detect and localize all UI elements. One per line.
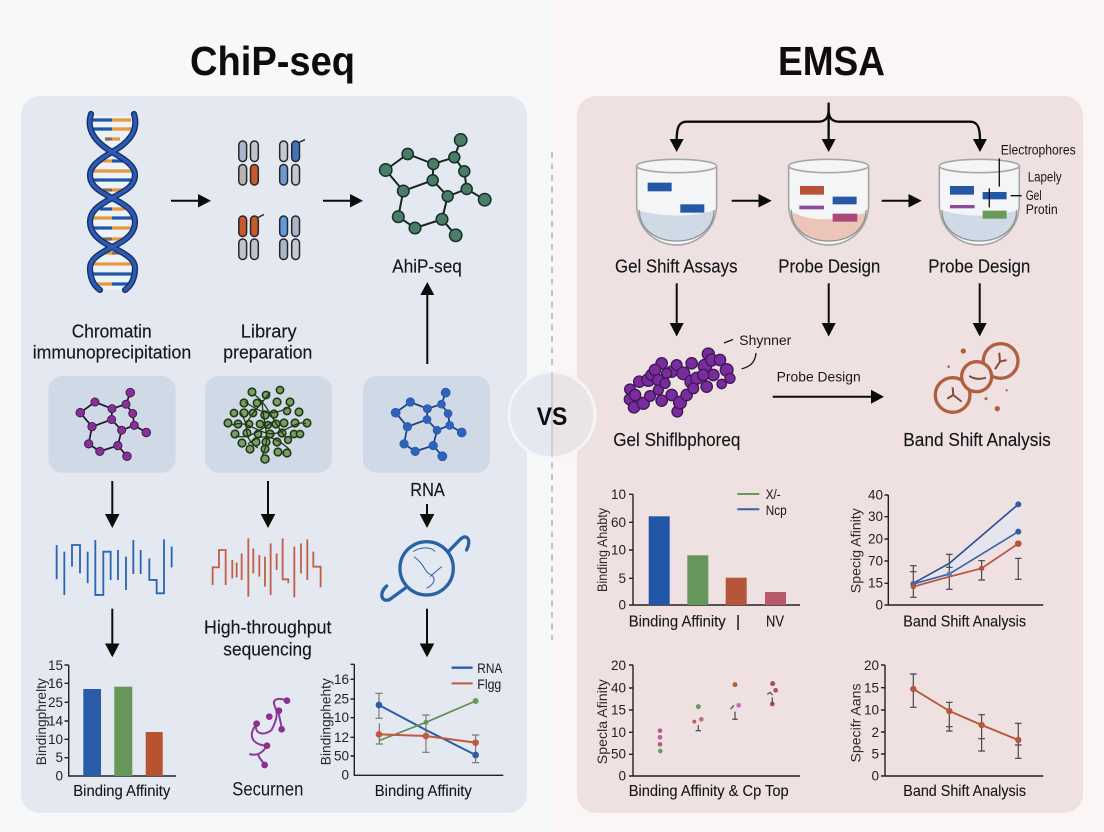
- icon: DNA double helix: [90, 114, 135, 290]
- chart: ChiP-seq bar chart: 5: [55, 750, 63, 765]
- chart: EMSA bar chart: Ncp: [766, 503, 787, 518]
- arrow: beaker 2 to 3: [882, 194, 922, 208]
- tile: blue network: [363, 376, 490, 473]
- chart: ChiP-seq line chart: Binding Affinity: [375, 783, 472, 800]
- chart: EMSA multi-line chart: 15: [868, 576, 883, 590]
- VS badge: VS: [537, 403, 567, 431]
- arrow: blue trace down: [105, 609, 120, 657]
- chart: EMSA multi-line chart: 0: [875, 598, 883, 612]
- arrow: up to AhiP-seq: [420, 282, 434, 364]
- chart: EMSA dot plot: 40: [611, 680, 626, 696]
- chart: ChiP-seq bar chart: Binding Affinity: [73, 783, 170, 800]
- chart: EMSA bar chart: NV: [766, 614, 784, 631]
- panel: ChiP-seq background: [21, 96, 527, 813]
- label: Gel Shift Assays: Gel Shift Assays: [615, 256, 738, 277]
- chart: EMSA dot plot: Binding Affinity & Cp Top: [629, 783, 789, 800]
- title: EMSA: EMSA: [778, 38, 885, 84]
- chart: ChiP-seq line chart: 0: [341, 768, 349, 782]
- label: Chromatin immunoprecipitation: [33, 320, 191, 362]
- label: Probe Design (right): Probe Design: [928, 256, 1030, 277]
- chart: EMSA bar chart: [594, 487, 800, 631]
- chart: EMSA dot plot: 10: [611, 725, 626, 740]
- arrow: DNA to library: [171, 194, 211, 208]
- chart: EMSA bar chart: 10: [611, 542, 626, 558]
- chart: ChiP-seq line chart: 10: [334, 710, 349, 725]
- chart: ChiP-seq line chart: 16: [334, 672, 349, 687]
- chart: EMSA dot plot: 0: [618, 768, 626, 784]
- label: Electrophores: Electrophores: [1001, 142, 1076, 157]
- label: RNA: RNA: [410, 479, 445, 500]
- arrow: RNA down: [420, 504, 434, 528]
- chart: EMSA descending line chart: 10: [864, 702, 879, 718]
- arrow: beaker 1 to 2: [732, 194, 772, 208]
- chart: ChiP-seq bar chart: Bindingphrelty: [33, 678, 49, 765]
- icon: green molecular network: [380, 134, 491, 242]
- chart: ChiP-seq line chart: [318, 661, 503, 800]
- label: High-throughput sequencing: sequencing: [223, 638, 312, 660]
- label: Securnen: Securnen: [232, 779, 303, 801]
- label: Protin: Protin: [1026, 202, 1058, 217]
- chart: ChiP-seq line chart: 25: [334, 692, 349, 706]
- chart: EMSA descending line chart: 20: [864, 658, 879, 673]
- arrow: branching tree from EMSA title: [670, 103, 987, 152]
- arrow: middle beaker down: [822, 283, 836, 336]
- icon: band shift rings: [935, 344, 1018, 412]
- chart: EMSA dot plot: 15: [611, 702, 626, 718]
- icon: chromosome fragments: [239, 140, 305, 260]
- chart: EMSA multi-line chart: 30: [868, 509, 883, 524]
- chart: EMSA descending line chart: Band Shift Analysis: [903, 783, 1026, 800]
- icon: beaker 1: [637, 159, 717, 245]
- chart: ChiP-seq line chart: 12: [334, 730, 349, 745]
- chart: EMSA descending line chart: [848, 658, 1043, 800]
- arrow: purple tile down: [105, 481, 120, 528]
- label: Lapely: Lapely: [1028, 170, 1062, 185]
- chart: EMSA bar chart: Binding Affinity: [629, 614, 726, 631]
- label: High-throughput sequencing: High-throughput: [204, 616, 332, 638]
- chart: EMSA multi-line chart: 20: [868, 532, 883, 546]
- label: AhiP-seq: AhiP-seq: [392, 256, 462, 277]
- arrow: library to network: [323, 194, 363, 208]
- chart: ChiP-seq bar chart: 15: [48, 658, 63, 673]
- VS badge: [509, 372, 595, 458]
- callout: Shynner: Shynner: [739, 333, 792, 348]
- chart: EMSA descending line chart: 2: [871, 725, 879, 740]
- arrow: left beaker down: [670, 283, 684, 336]
- chart: EMSA descending line chart: Specifr Aans: [848, 684, 864, 762]
- callout: Shynner: [724, 333, 792, 369]
- label: Probe Design (middle): Probe Design: [778, 256, 880, 277]
- label: Band Shift Analysis: Band Shift Analysis: [903, 429, 1051, 450]
- chart: EMSA bar chart: 60: [611, 515, 626, 530]
- chart: EMSA dot plot: [594, 658, 800, 800]
- icon: purple protein cluster: [624, 348, 735, 417]
- icon: RNA loop ring: [382, 537, 469, 600]
- label: Chromatin immunoprecipitation: Chromatin: [72, 320, 152, 341]
- icon: purple strand: [249, 697, 290, 768]
- chart: EMSA bar chart: Binding Ahabty: [594, 508, 610, 592]
- chart: ChiP-seq bar chart: 10: [48, 732, 63, 747]
- chart: EMSA bar chart: |: [736, 614, 740, 631]
- chart: EMSA multi-line chart: 70: [868, 554, 883, 568]
- chart: EMSA descending line chart: 15: [864, 680, 879, 696]
- chart: EMSA multi-line chart: Band Shift Analysis: [903, 614, 1026, 631]
- title: ChiP-seq: ChiP-seq: [190, 38, 355, 84]
- label: Library preparation: preparation: [223, 341, 312, 362]
- chart: EMSA descending line chart: 0: [871, 768, 879, 784]
- chart: EMSA multi-line chart: Specig Afinity: [848, 508, 864, 593]
- chart: ChiP-seq line chart: Bindingphehty: [318, 678, 334, 765]
- chart: ChiP-seq bar chart: 0: [55, 768, 63, 784]
- chart: ChiP-seq line chart: Flgg: [477, 677, 501, 692]
- chart: EMSA multi-line chart: 40: [868, 488, 883, 502]
- icon: beaker 3 with callouts: [939, 158, 1022, 245]
- arrow: green tile down: [261, 481, 275, 528]
- arrow: right beaker down: [973, 283, 987, 336]
- chart: ChiP-seq line chart: 50: [334, 748, 349, 764]
- label: Gel: Gel: [1026, 188, 1042, 203]
- chart: ChiP-seq bar chart: 16: [48, 676, 63, 691]
- chart: EMSA bar chart: 10: [611, 487, 626, 502]
- label: Library preparation: Library: [241, 320, 297, 341]
- label: Gel Shiflbphoreq: Gel Shiflbphoreq: [613, 429, 740, 450]
- label: Chromatin immunoprecipitation: immunoprecipitation: [33, 341, 191, 362]
- chart: EMSA bar chart: X/-: [766, 487, 781, 502]
- chart: ChiP-seq bar chart: 25: [48, 695, 63, 710]
- label: High-throughput sequencing: [204, 616, 332, 660]
- chart: EMSA bar chart: 5: [618, 571, 626, 586]
- chart: EMSA descending line chart: 5: [871, 746, 879, 762]
- arrow: ring down: [420, 609, 434, 657]
- panel: EMSA background: [577, 96, 1083, 813]
- chart: EMSA bar chart: 0: [618, 598, 626, 612]
- chart: ChiP-seq bar chart: 14: [48, 714, 63, 728]
- chart: EMSA multi-line chart: [848, 488, 1043, 631]
- label: Library preparation: [223, 320, 312, 362]
- chart: red sequencing trace: [213, 538, 321, 597]
- chart: blue sequencing trace: [57, 539, 172, 595]
- icon: beaker 2: [789, 159, 869, 245]
- tile: green cluster: [205, 376, 332, 473]
- chart: EMSA dot plot: 50: [611, 746, 626, 762]
- chart: ChiP-seq line chart: RNA: [477, 661, 502, 676]
- tile: purple network: [48, 376, 176, 473]
- arrow: cluster to band shift: [773, 390, 884, 404]
- chart: ChiP-seq bar chart: [33, 658, 176, 800]
- label: Probe Design arrow caption: Probe Design: [777, 369, 861, 384]
- chart: EMSA dot plot: 20: [611, 658, 626, 673]
- chart: EMSA dot plot: Specla Afinity: [594, 679, 610, 764]
